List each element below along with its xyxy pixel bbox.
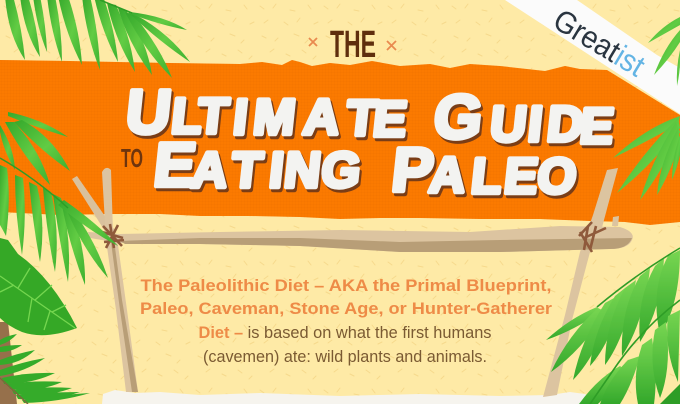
palm trunk	[0, 322, 17, 404]
title shadow: LTIMATE	[171, 91, 412, 150]
palm frond: left middle	[0, 112, 118, 285]
word: to: TO	[121, 143, 143, 173]
corner leaf	[660, 384, 680, 404]
mixed line three: Diet – is based on what the first humans	[198, 323, 492, 342]
body line four: (cavemen) ate: wild plants and animals.	[203, 347, 487, 366]
orange lead line two: Paleo, Caveman, Stone Age, or Hunter-Gatherer	[140, 299, 552, 318]
white ribbon	[505, 0, 680, 114]
intro text block	[140, 276, 552, 366]
right post	[543, 168, 618, 397]
title shadow: UIDE	[489, 99, 619, 157]
title lettering: G	[431, 83, 486, 152]
title lettering: UIDE	[487, 96, 617, 154]
orange torn banner	[0, 60, 680, 225]
ribbon: greatist logo	[505, 0, 680, 114]
cross ornament left	[309, 38, 317, 46]
second frond	[579, 366, 628, 404]
title shadow: P	[391, 139, 439, 208]
left post	[102, 168, 138, 392]
right rope lashing	[579, 222, 606, 252]
left diagonal stick	[72, 176, 116, 236]
title: ultimate guide	[123, 78, 620, 208]
title lettering: U	[123, 78, 175, 147]
right stub	[612, 216, 619, 226]
fern: bottom left	[0, 334, 90, 404]
title lettering: ATING	[189, 142, 364, 198]
title shadow: ATING	[191, 145, 366, 201]
palm frond: right middle	[613, 116, 680, 200]
title shadow: G	[433, 86, 488, 155]
heading: the	[309, 24, 396, 66]
orange lead line one: The Paleolithic Diet – AKA the Primal Blueprint,	[140, 276, 552, 295]
title shadow	[125, 81, 620, 208]
title lettering	[123, 78, 618, 205]
left rope lashing	[102, 224, 124, 248]
cross ornament right	[387, 41, 396, 50]
title lettering: ALEO	[427, 147, 580, 204]
palm frond: top right	[648, 17, 680, 86]
leaf veins	[0, 268, 75, 330]
title shadow: U	[125, 81, 177, 150]
title shadow: ALEO	[429, 150, 582, 207]
white paper strip at bottom	[102, 390, 600, 404]
upper stem	[597, 248, 680, 307]
stem	[0, 158, 68, 208]
palm frond: top left	[5, 0, 190, 78]
title lettering: E	[151, 131, 199, 200]
horizontal log	[88, 226, 633, 252]
stem	[100, 0, 132, 13]
banana leaf	[0, 238, 77, 335]
fern stem	[0, 378, 28, 404]
palm frond: lower right	[546, 248, 680, 404]
the word THE: THE	[330, 24, 376, 66]
title lettering: P	[389, 136, 437, 205]
frame: wooden sticks	[72, 168, 633, 397]
title shadow: E	[153, 134, 201, 203]
greatist wordmark: Greatist	[547, 2, 651, 84]
lower stem	[590, 300, 680, 404]
title lettering: LTIMATE	[169, 88, 410, 147]
